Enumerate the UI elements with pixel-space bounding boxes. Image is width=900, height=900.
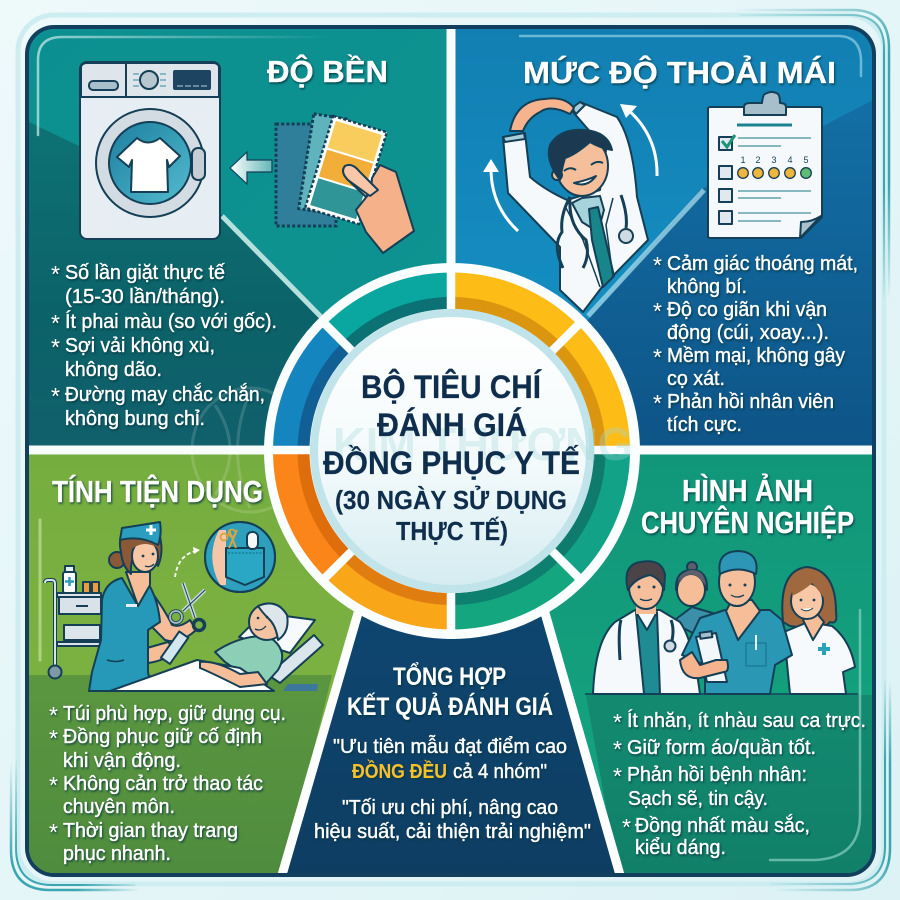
title: hình ảnh chuyên nghiệp: HÌNH ẢNH xyxy=(682,473,813,508)
icon: uniform pocket xyxy=(205,522,275,592)
list: độ bền: Ít phai màu (so với gốc). xyxy=(65,310,277,333)
list: tính tiện dụng: * xyxy=(49,772,58,798)
heading: tổng hợp: KẾT QUẢ ĐÁNH GIÁ xyxy=(347,691,553,721)
list: hình ảnh chuyên nghiệp: kiểu dáng. xyxy=(635,836,726,859)
ring segments xyxy=(286,285,618,617)
panel: tính tiện dụng xyxy=(29,454,356,873)
list: mức độ thoải mái: * xyxy=(653,344,662,370)
title: tính tiện dụng: TÍNH TIỆN DỤNG xyxy=(52,473,263,509)
list: mức độ thoải mái: động (cúi, xoay...). xyxy=(667,321,829,344)
white cross dividers xyxy=(29,29,872,454)
list: mức độ thoải mái: tích cực. xyxy=(667,413,742,436)
quote: tối ưu: "Tối ưu chi phí, nâng cao xyxy=(342,796,558,819)
list: tính tiện dụng: khi vận động. xyxy=(63,749,181,772)
icon: clipboard checklist: 2 xyxy=(755,155,761,165)
center title xyxy=(323,369,580,546)
panel: mức độ thoải mái xyxy=(450,29,873,450)
icon: washing machine xyxy=(80,62,220,239)
list: mức độ thoải mái: Độ co giãn khi vận xyxy=(667,298,827,321)
list: hình ảnh chuyên nghiệp: Giữ form áo/quần tốt. xyxy=(627,736,816,759)
icon: clipboard checklist: 4 xyxy=(787,155,793,165)
arrow: swatches to washer xyxy=(230,152,272,184)
arrows: stretching motion xyxy=(483,104,657,231)
icon: scissors and bandage xyxy=(161,583,205,664)
list: độ bền: Sợi vải không xù, xyxy=(65,334,215,357)
list: mức độ thoải mái: cọ xát. xyxy=(667,367,725,390)
list: hình ảnh chuyên nghiệp: Phản hồi bệnh nhân: xyxy=(627,763,807,786)
list: mức độ thoải mái xyxy=(653,252,858,436)
list: tính tiện dụng: Thời gian thay trang xyxy=(63,819,238,842)
center title: ĐỒNG PHỤC Y TẾ xyxy=(323,445,580,481)
title: hình ảnh chuyên nghiệp xyxy=(641,473,854,540)
center title: BỘ TIÊU CHÍ xyxy=(361,369,542,405)
quote: tối ưu: hiệu suất, cải thiện trải nghiệm" xyxy=(314,820,591,843)
quote: ưu tiên: cả 4 nhóm" xyxy=(453,760,547,783)
list: độ bền: Đường may chắc chắn, xyxy=(65,383,265,406)
heading: tổng hợp: TỔNG HỢP xyxy=(393,661,506,691)
list: độ bền: * xyxy=(51,334,60,360)
quote: ưu tiên: "Ưu tiên mẫu đạt điểm cao xyxy=(333,735,567,758)
heading: tổng hợp xyxy=(347,661,553,721)
quote: ưu tiên: ĐỒNG ĐỀU xyxy=(352,759,447,783)
list: độ bền: Số lần giặt thực tế xyxy=(65,261,226,284)
list: độ bền: * xyxy=(51,383,60,409)
list: mức độ thoải mái: * xyxy=(653,298,662,324)
list: độ bền: không dão. xyxy=(65,358,162,381)
list: hình ảnh chuyên nghiệp: * xyxy=(613,709,622,735)
list: tính tiện dụng: * xyxy=(49,725,58,751)
icon: clipboard checklist xyxy=(708,92,822,238)
arrow: to pocket xyxy=(175,547,200,577)
icon: clipboard checklist: 1 xyxy=(740,155,746,165)
center title: THỰC TẾ) xyxy=(396,516,508,546)
icon: medical cart xyxy=(45,566,101,678)
list: tính tiện dụng: phục nhanh. xyxy=(63,842,171,865)
list: hình ảnh chuyên nghiệp: Sạch sẽ, tin cậy. xyxy=(628,787,768,810)
panel: hình ảnh chuyên nghiệp xyxy=(549,454,872,873)
icon: fabric swatches in hand xyxy=(276,114,414,253)
list: hình ảnh chuyên nghiệp: * xyxy=(613,736,622,762)
list: mức độ thoải mái: * xyxy=(653,390,662,416)
center title: ĐÁNH GIÁ xyxy=(377,407,527,443)
icon: clipboard checklist: 5 xyxy=(803,155,809,165)
icon: t-shirt xyxy=(117,138,180,192)
list: mức độ thoải mái: Cảm giác thoáng mát, xyxy=(667,252,858,275)
list: hình ảnh chuyên nghiệp: Ít nhăn, ít nhàu sau ca trực. xyxy=(627,709,866,732)
list: tính tiện dụng: chuyên môn. xyxy=(63,795,175,818)
icon: stretching doctor xyxy=(503,98,648,312)
list: mức độ thoải mái: không bí. xyxy=(667,275,747,298)
list: tính tiện dụng: Túi phù hợp, giữ dụng cụ. xyxy=(63,702,286,725)
list: độ bền: (15-30 lần/tháng). xyxy=(65,285,225,308)
title: độ bền: ĐỘ BỀN xyxy=(267,53,388,89)
list: độ bền: * xyxy=(51,310,60,336)
icon: patient in bed xyxy=(110,603,323,691)
list: hình ảnh chuyên nghiệp: * xyxy=(622,814,631,840)
list: hình ảnh chuyên nghiệp xyxy=(613,709,866,859)
icon: nurse xyxy=(89,522,196,691)
title: mức độ thoải mái: MỨC ĐỘ THOẢI MÁI xyxy=(523,54,836,90)
list: hình ảnh chuyên nghiệp: * xyxy=(613,763,622,789)
list: tính tiện dụng: * xyxy=(49,819,58,845)
list: tính tiện dụng: * xyxy=(49,702,58,728)
center title: (30 NGÀY SỬ DỤNG xyxy=(335,484,567,515)
icon: clipboard checklist: 3 xyxy=(771,155,777,165)
list: mức độ thoải mái: Mềm mại, không gây xyxy=(667,344,846,367)
quote: tối ưu xyxy=(314,796,591,843)
list: mức độ thoải mái: * xyxy=(653,252,662,278)
list: độ bền xyxy=(51,261,277,430)
list: tính tiện dụng xyxy=(49,702,286,865)
watermark logo xyxy=(192,388,308,512)
list: độ bền: không bung chỉ. xyxy=(65,407,205,430)
quote: ưu tiên xyxy=(333,735,567,783)
list: tính tiện dụng: Không cản trở thao tác xyxy=(63,772,263,795)
icon: medical team xyxy=(585,551,858,694)
list: hình ảnh chuyên nghiệp: Đồng nhất màu sắc, xyxy=(635,814,810,837)
panel: tổng hợp kết quả xyxy=(282,610,620,875)
watermark text: KIM THƯƠNG xyxy=(333,418,633,470)
list: mức độ thoải mái: Phản hồi nhân viên xyxy=(667,390,834,413)
list: độ bền: * xyxy=(51,261,60,287)
title: hình ảnh chuyên nghiệp: CHUYÊN NGHIỆP xyxy=(641,504,854,540)
panel: độ bền xyxy=(29,29,451,450)
center badge xyxy=(264,263,640,639)
list: tính tiện dụng: Đồng phục giữ cố định xyxy=(63,725,262,748)
